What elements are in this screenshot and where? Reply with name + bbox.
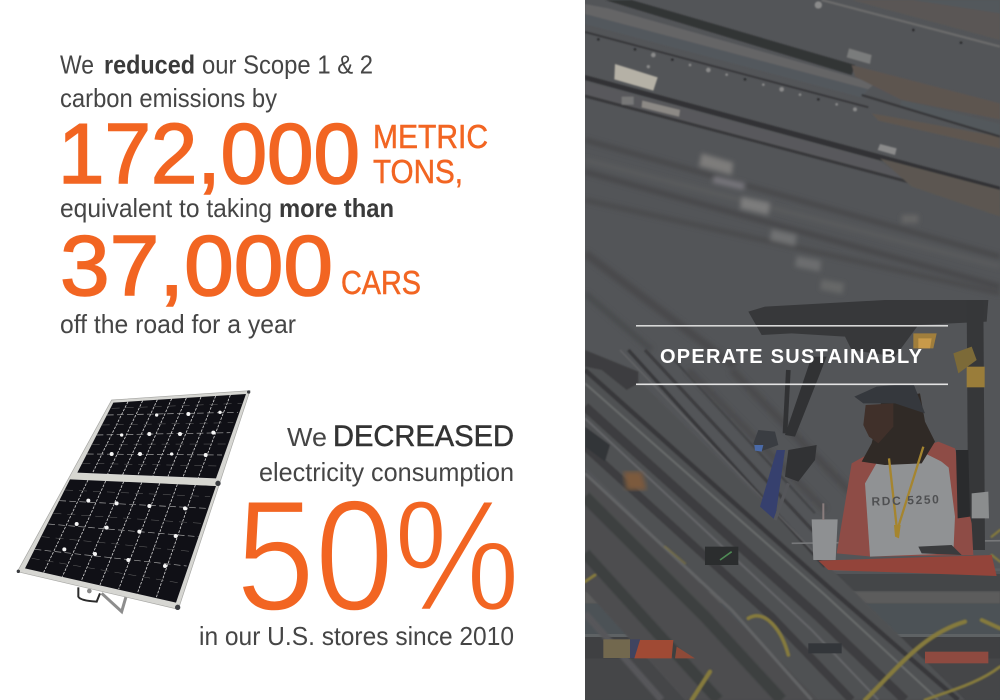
big number: 50 percent: 50% <box>236 468 520 644</box>
text block: off the road: off the road for a year <box>60 309 296 339</box>
text block: stores since 2010: in our U.S. stores since 2010 <box>199 621 514 651</box>
text block: scope 1 and 2 reduction: carbon emissions by <box>60 83 277 113</box>
text block: scope 1 and 2 reduction <box>60 50 373 113</box>
photo: coloured machinery at the floor <box>603 541 1000 663</box>
text block: scope 1 and 2 reduction: We <box>60 50 94 80</box>
photo: worker in cap and raglan shirt <box>812 383 997 576</box>
photo: worker in cap and raglan shirt: RDC 5250 <box>871 492 939 509</box>
photo: upper conveyor belts <box>585 0 1000 217</box>
big number: 172,000 metric tons: TONS, <box>373 153 463 190</box>
text block: equivalent to <box>60 193 394 223</box>
heading text: OPERATE SUSTAINABLY <box>660 346 923 368</box>
big number: 172,000 metric tons: METRIC <box>373 118 488 155</box>
panel: photo of a worker at a conveyor <box>585 0 1000 700</box>
big number: 37,000 cars: CARS <box>341 264 421 301</box>
big number: 172,000 metric tons: 172,000 <box>58 107 360 202</box>
text block: decreased electricity: We <box>287 422 327 452</box>
photo: yellow cables <box>585 530 1000 700</box>
text block: equivalent to: more than <box>279 193 394 223</box>
solar panel corner brackets <box>17 390 250 610</box>
text block: equivalent to: equivalent to taking <box>60 193 272 223</box>
solar cell bright junctions <box>62 411 222 568</box>
photo: overhead canopy and scanner arm <box>748 300 988 550</box>
photo: blurred rails and labels in the middle distance <box>585 140 1000 367</box>
image: folding solar panel <box>17 390 250 612</box>
text block: decreased electricity <box>259 420 514 487</box>
big number: 37,000 cars: 37,000 <box>60 219 333 314</box>
solar panel stand <box>78 587 126 612</box>
photo: diagonal conveyor tracks <box>585 350 965 700</box>
text block: scope 1 and 2 reduction: our Scope 1 & 2 <box>202 50 373 80</box>
text block: decreased electricity: DECREASED <box>333 420 514 453</box>
text block: scope 1 and 2 reduction: reduced <box>104 50 195 80</box>
solar cell grid lines <box>32 395 242 597</box>
text block: decreased electricity: electricity consumption <box>259 457 514 487</box>
photo: lower conveyor floor bands <box>585 568 1000 700</box>
